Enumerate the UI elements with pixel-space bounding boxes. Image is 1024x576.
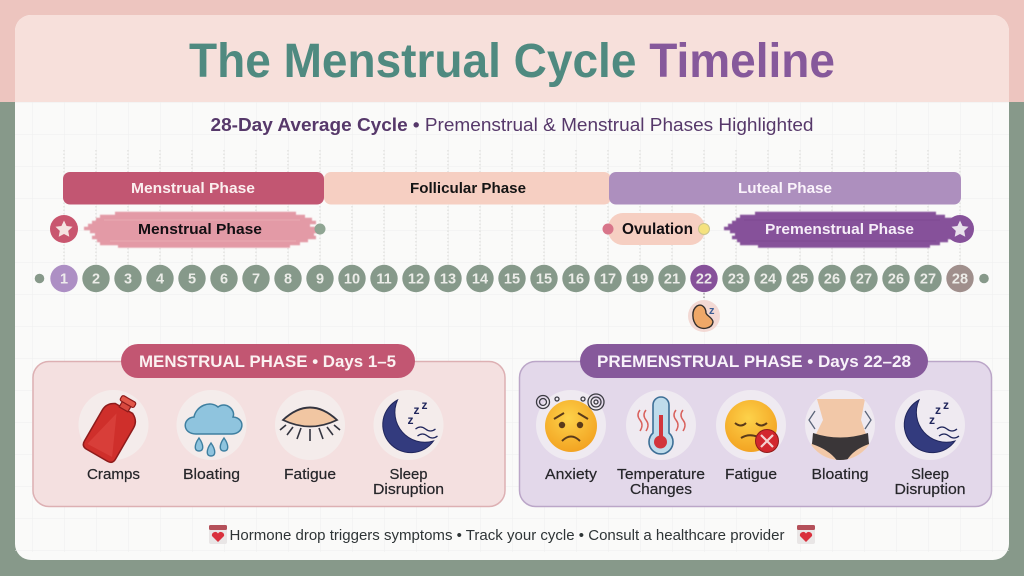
title: The Menstrual Cycle Timeline <box>189 35 835 88</box>
icon: day 22 bean: z <box>709 305 715 317</box>
symptom: sleep disruption: z <box>422 398 428 412</box>
timeline end dot: left <box>35 274 44 283</box>
symptom: sleep disruption: z <box>929 413 935 427</box>
day timeline: 26 <box>824 272 840 288</box>
brush label: premenstrual phase: Premenstrual Phase <box>765 221 914 238</box>
panel: premenstrual phase <box>520 344 992 506</box>
panel heading: PREMENSTRUAL PHASE • Days 22–28 <box>597 352 911 371</box>
day timeline: 27 <box>856 272 872 288</box>
timeline end dot: right <box>979 274 989 283</box>
phase bar: luteal <box>609 172 961 204</box>
symptom: cramps <box>78 390 148 483</box>
day timeline: 17 <box>600 272 616 288</box>
symptom: sleep disruption: z <box>414 403 420 417</box>
icon: calendar heart left <box>209 525 227 544</box>
symptom: sleep disruption: Sleep <box>911 467 949 483</box>
ovulation pill <box>602 213 710 245</box>
symptom: anxiety: Anxiety <box>545 467 598 483</box>
symptom: bloating: Bloating <box>183 467 240 483</box>
phase bar: luteal: Luteal Phase <box>738 181 832 197</box>
day timeline: 22 <box>696 272 712 288</box>
day timeline: 23 <box>728 272 744 288</box>
day timeline: 5 <box>188 272 196 288</box>
symptom: temperature changes: Changes <box>630 482 692 498</box>
symptom: temperature changes <box>617 390 705 498</box>
symptom: sleep disruption: z <box>943 398 949 412</box>
marker dot: end of menstrual brush <box>314 224 326 234</box>
day timeline: 8 <box>284 272 292 288</box>
day timeline: 6 <box>220 272 228 288</box>
footer note: Hormone drop triggers symptoms • Track your cycle • Consult a healthcare provider <box>230 527 784 544</box>
symptom: bloating <box>176 390 246 483</box>
symptom: anxiety <box>536 390 606 483</box>
ovulation pill: Ovulation <box>622 221 693 238</box>
day timeline: 2 <box>92 272 100 288</box>
day timeline: 26 <box>888 272 904 288</box>
panel heading <box>580 344 928 378</box>
day timeline: 19 <box>632 272 648 288</box>
day timeline: 21 <box>664 272 680 288</box>
symptom: cramps: Cramps <box>87 467 140 483</box>
day timeline: 7 <box>252 272 260 288</box>
day timeline: 10 <box>344 272 360 288</box>
subtitle: 28-Day Average Cycle • Premenstrual & Menstrual Phases Highlighted <box>210 115 814 135</box>
symptom: fatigue: Fatigue <box>725 467 777 483</box>
phase bar: follicular <box>324 172 611 204</box>
day timeline <box>50 265 974 292</box>
symptom: sleep disruption <box>894 390 966 498</box>
symptom: sleep disruption: Disruption <box>894 482 966 498</box>
panel heading: MENSTRUAL PHASE • Days 1–5 <box>139 352 396 371</box>
icon: calendar heart right <box>797 525 815 544</box>
day timeline: 11 <box>376 272 392 288</box>
day timeline: 14 <box>472 272 488 288</box>
symptom: fatigue <box>275 390 345 483</box>
day timeline: 15 <box>504 272 520 288</box>
brush label: menstrual phase: Menstrual Phase <box>138 222 262 238</box>
day timeline: 28 <box>952 272 968 288</box>
symptom: sleep disruption: Sleep <box>390 467 428 483</box>
symptom: temperature changes: Temperature <box>617 467 705 483</box>
star marker: day 28 <box>946 215 974 243</box>
phase bar: menstrual: Menstrual Phase <box>131 181 255 197</box>
day timeline: 13 <box>440 272 456 288</box>
brush label: menstrual phase <box>84 214 320 246</box>
symptom: bloating: Bloating <box>812 467 868 483</box>
symptom: sleep disruption: z <box>408 413 414 427</box>
day timeline: 3 <box>124 272 132 288</box>
day timeline: 16 <box>568 272 584 288</box>
day timeline: 24 <box>760 272 776 288</box>
symptom: fatigue <box>716 390 786 483</box>
day timeline: 25 <box>792 272 808 288</box>
phase bar: menstrual <box>63 172 324 204</box>
phase bar: follicular: Follicular Phase <box>410 181 526 197</box>
icon: day 22 bean <box>688 293 720 332</box>
day timeline: 27 <box>920 272 936 288</box>
day timeline: 1 <box>60 272 68 288</box>
panel: menstrual phase <box>33 344 505 506</box>
day guide lines <box>64 150 960 265</box>
brush label: premenstrual phase <box>724 214 960 246</box>
symptom: sleep disruption: Disruption <box>373 482 444 498</box>
symptom: sleep disruption: z <box>935 403 941 417</box>
day timeline: 9 <box>316 272 324 288</box>
day timeline: 12 <box>408 272 424 288</box>
symptom: fatigue: Fatigue <box>284 467 336 483</box>
symptom: sleep disruption <box>373 390 444 498</box>
symptom: bloating <box>804 390 876 483</box>
day timeline: 15 <box>536 272 552 288</box>
panel heading <box>121 344 415 378</box>
day timeline: 4 <box>156 272 164 288</box>
star marker: day 1 <box>50 215 78 243</box>
